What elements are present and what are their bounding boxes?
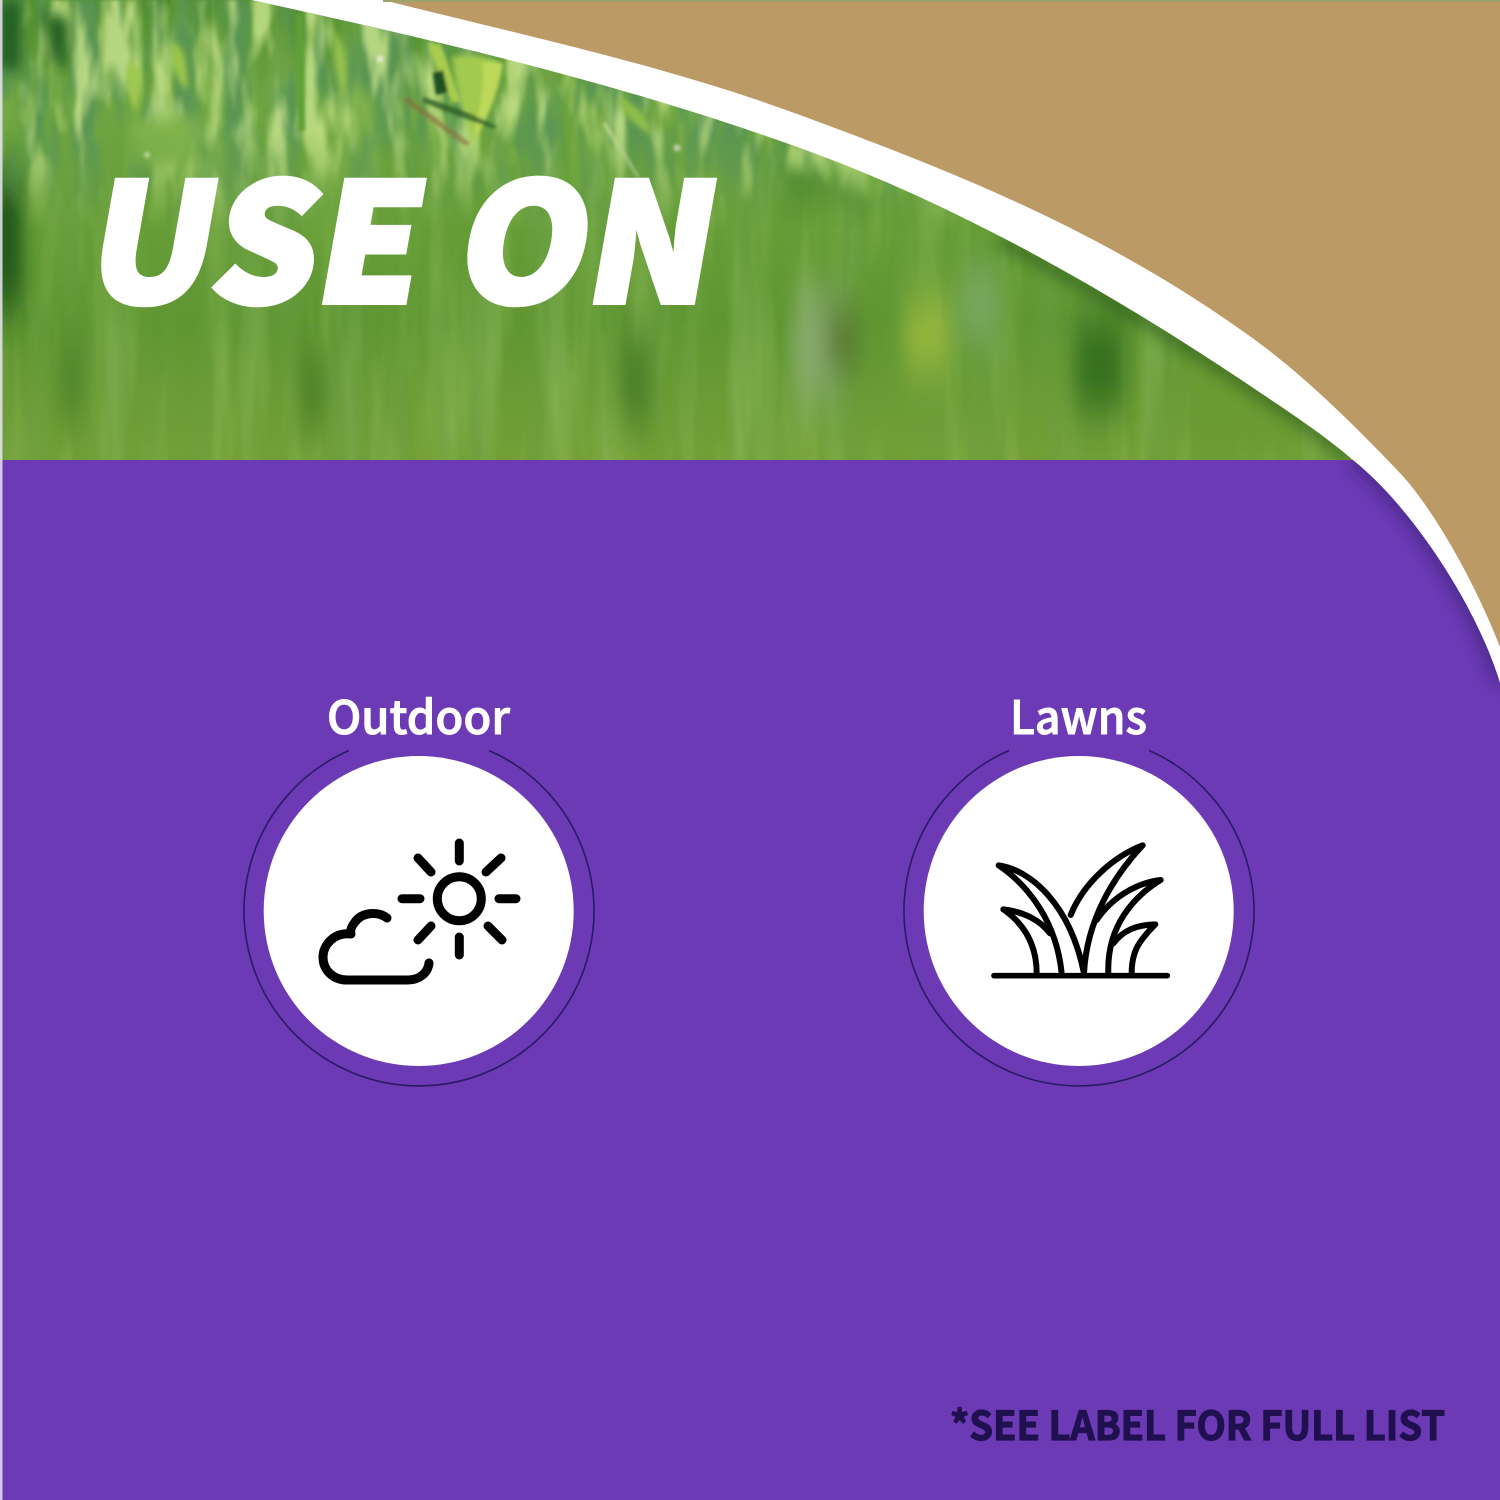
icon: grass [994, 845, 1167, 976]
icon: sun and cloud [323, 843, 516, 980]
title: USE ON [74, 112, 741, 350]
label: lawns: Lawns [1010, 682, 1147, 748]
white circle: lawns [924, 756, 1234, 1066]
tan corner background [0, 0, 1500, 700]
footnote: *SEE LABEL FOR FULL LIST [950, 1394, 1445, 1452]
grass blades in the upper photo [2, 0, 944, 220]
pale left edge [0, 0, 2, 1500]
item: outdoor [244, 682, 594, 1086]
ring: outdoor [244, 750, 594, 1086]
purple lower panel [0, 460, 1500, 700]
ring: lawns [904, 750, 1254, 1086]
white circle: outdoor [264, 756, 574, 1066]
white curved band [0, 0, 1500, 700]
shadow along the band [1000, 240, 1353, 460]
grass photo banner [0, 0, 1500, 460]
item: lawns [904, 682, 1254, 1086]
thin green sliver at top edge [383, 0, 1500, 2]
label: outdoor: Outdoor [327, 682, 510, 748]
